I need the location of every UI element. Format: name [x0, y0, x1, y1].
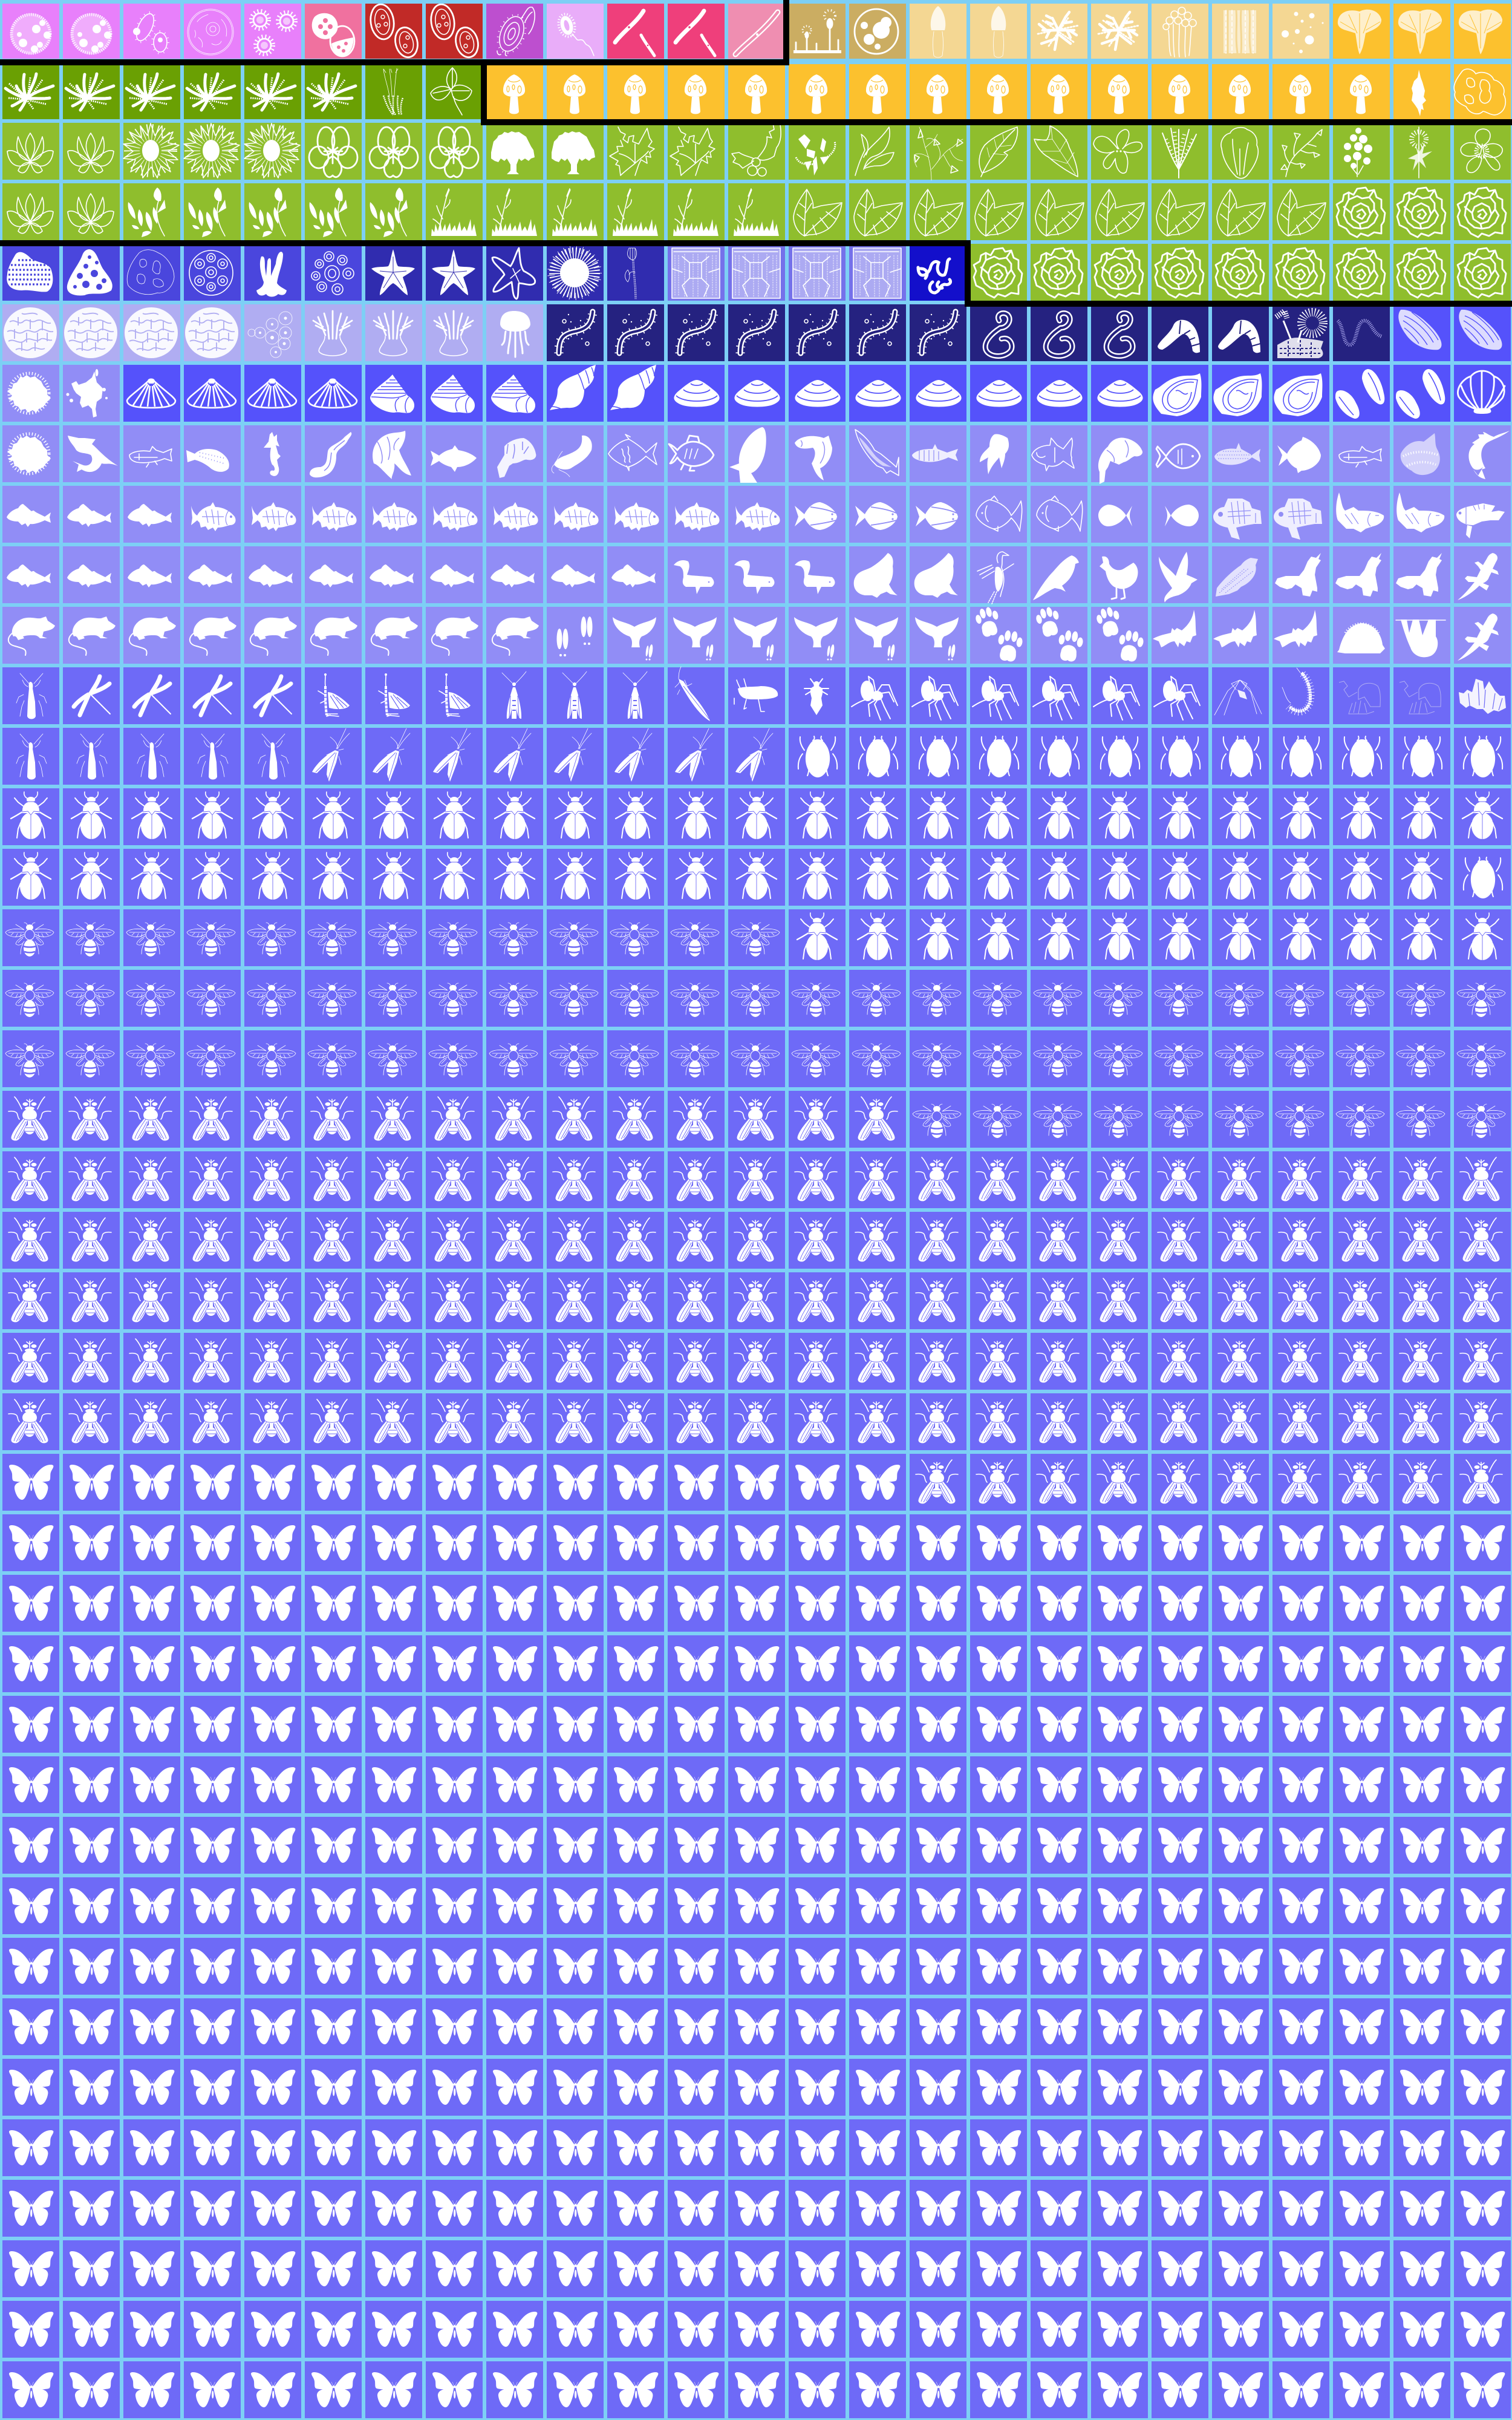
- tiles: dragonfly: [60, 666, 302, 726]
- tile: bark: [1210, 0, 1270, 60]
- panel: shells row 6: [0, 363, 1512, 424]
- tile: hoofprints: [544, 605, 605, 666]
- tile: moss: [363, 60, 423, 121]
- tile: worm knot: [907, 242, 968, 302]
- tiles: lacewing: [302, 726, 786, 786]
- tile: goldfish outline: [1028, 424, 1089, 484]
- tile: coral rings: [181, 242, 242, 302]
- tiles: frog: [847, 544, 968, 605]
- panel: flies rows 18 to 24: [0, 1089, 1512, 1512]
- tile: hen: [1089, 544, 1149, 605]
- tile: amoeba: [302, 0, 363, 60]
- tile: lichen: [1452, 60, 1512, 121]
- tiles: maple leaf: [605, 121, 726, 182]
- tile: grasshopper: [726, 666, 786, 726]
- tiles: starfish: [363, 242, 484, 302]
- tiles: mussel pair: [1331, 363, 1452, 424]
- panel: butterflies rows 25 to 39: [0, 1512, 1512, 2420]
- tiles: volvox: [0, 0, 121, 60]
- tiles: whale tail: [605, 605, 968, 666]
- tiles: bee: [907, 1089, 1512, 1150]
- top margin: [0, 0, 1512, 4]
- tile: splat: [60, 363, 121, 424]
- tile: louse: [786, 666, 847, 726]
- tile: spores: [847, 0, 907, 60]
- panel: fishes row 8: [0, 484, 1512, 544]
- tiles: whelk: [363, 363, 544, 424]
- tiles: fly: [0, 1150, 1512, 1452]
- tile: sprig: [847, 121, 907, 182]
- tile: pufferfish: [181, 424, 242, 484]
- tile: clover: [423, 60, 484, 121]
- tiles: chanterelle: [1331, 0, 1512, 60]
- tiles: mint leaves: [786, 182, 1331, 242]
- tile: fish outline: [121, 424, 181, 484]
- tiles: perch: [0, 484, 181, 544]
- tile: lettuce: [1210, 121, 1270, 182]
- tiles: stonefly: [484, 666, 665, 726]
- tiles: perch: [0, 544, 665, 605]
- tiles: coral fungus: [1028, 0, 1149, 60]
- panel: fishes row 7: [0, 424, 1512, 484]
- tile: herb bundle: [1149, 121, 1210, 182]
- tile: spiny blob: [0, 424, 60, 484]
- tile: spotted fish: [484, 424, 544, 484]
- tile: broad leaf: [1028, 121, 1089, 182]
- tiles: paramecium: [363, 0, 484, 60]
- tiles: eagle: [1270, 544, 1452, 605]
- tile: oval beetle: [1452, 847, 1512, 908]
- tile: cormorant: [968, 544, 1028, 605]
- tile: catfish: [544, 424, 605, 484]
- tile: seahorse: [242, 424, 302, 484]
- tile: spiky cells: [242, 0, 302, 60]
- tile: sea urchin: [544, 242, 605, 302]
- tile: leaping fish: [726, 424, 786, 484]
- tile: finger sponge: [242, 242, 302, 302]
- tile: jellyfish: [484, 302, 544, 363]
- tiles: fly: [0, 1089, 907, 1150]
- tile: trout: [847, 424, 907, 484]
- panel: invertebrates row 4: [0, 242, 1512, 302]
- tiles: rose: [968, 242, 1512, 302]
- panel: mammals row 10: [0, 605, 1512, 666]
- tile: hedgehog: [1331, 605, 1391, 666]
- tiles: tree: [484, 121, 605, 182]
- tiles: butterfly: [0, 1512, 1512, 2420]
- tiles: sunflower: [121, 121, 302, 182]
- tile: mould: [786, 0, 847, 60]
- tile: marlin: [1452, 424, 1512, 484]
- tile: thin worm: [1331, 302, 1391, 363]
- tiles: ground beetle: [0, 786, 1512, 847]
- group boundary: first black step line: [0, 0, 1512, 122]
- tile: small fish: [907, 424, 968, 484]
- tile: fish outline: [1331, 424, 1391, 484]
- tile: vine: [907, 121, 968, 182]
- tiles: oyster: [1149, 363, 1331, 424]
- tiles: conch: [544, 363, 665, 424]
- tiles: cod: [1331, 484, 1452, 544]
- tile: lizard: [1452, 544, 1512, 605]
- tiles: spider: [847, 666, 1210, 726]
- tiles: stick insect: [0, 726, 302, 786]
- tile: four-petal flower: [1089, 121, 1149, 182]
- tile: protozoan: [484, 0, 544, 60]
- group boundary: second black step line: [0, 243, 1512, 304]
- tiles: oval beetle: [786, 726, 1512, 786]
- tiles: flatfish: [786, 484, 968, 544]
- panel: insects row 12: [0, 726, 1512, 786]
- tile: harvestman: [1210, 666, 1270, 726]
- tiles: plate texture: [665, 242, 907, 302]
- panel: microbes and fungi row 0: [0, 0, 1512, 60]
- tiles: brain coral: [0, 302, 242, 363]
- tiles: fly: [907, 1452, 1512, 1512]
- panel: plants row 3: [0, 182, 1512, 242]
- tile: songbird: [1028, 544, 1089, 605]
- tiles: coil worm: [968, 302, 1149, 363]
- tiles: lotus: [0, 121, 121, 182]
- tiles: angelfish outline: [968, 484, 1089, 544]
- tile: fish right: [1149, 484, 1210, 544]
- tiles: ground beetle: [786, 908, 1512, 968]
- tile: fish silhouette: [423, 424, 484, 484]
- tile: plump fish: [1270, 424, 1331, 484]
- tile: salmon: [786, 424, 847, 484]
- tiles: mayfly: [302, 666, 484, 726]
- tile: centipede: [1270, 666, 1331, 726]
- tile: zoanthid: [242, 302, 302, 363]
- tile: flowering herb: [1391, 121, 1452, 182]
- tiles: cichlid: [1210, 484, 1331, 544]
- tile: leaf: [968, 121, 1028, 182]
- tile: flagellate: [544, 0, 605, 60]
- panel: bees rows 16 and 17: [0, 968, 1512, 1089]
- tiles: diatoms: [605, 0, 726, 60]
- tiles: carp: [181, 484, 786, 544]
- tiles: duck: [665, 544, 847, 605]
- tiles: rose: [1331, 182, 1512, 242]
- tiles: bat: [1149, 605, 1331, 666]
- tile: outline fish: [665, 424, 726, 484]
- tile: textured fish: [1210, 424, 1270, 484]
- tiles: bee: [0, 968, 1512, 1089]
- tile: goldfish: [968, 424, 1028, 484]
- tile: lizard: [1452, 605, 1512, 666]
- tiles: branch: [121, 182, 423, 242]
- tiles: lotus: [0, 182, 121, 242]
- tiles: rat: [0, 605, 544, 666]
- tiles: paw prints: [968, 605, 1149, 666]
- panel: marine row 5: [0, 302, 1512, 363]
- tiles: fern tuft: [0, 60, 363, 121]
- tile: flower bunch: [1331, 121, 1391, 182]
- tile: twig: [1270, 121, 1331, 182]
- tile: insect cluster: [1452, 666, 1512, 726]
- tile: enoki: [1149, 0, 1210, 60]
- tiles: morel: [907, 0, 1028, 60]
- tile: shark: [60, 424, 121, 484]
- tile: eel: [302, 424, 363, 484]
- panel: plants and mushrooms row 1: [0, 60, 1512, 121]
- tile: speckled fish: [1391, 424, 1452, 484]
- tile: crinoid: [605, 242, 665, 302]
- tile: sloth: [1391, 605, 1452, 666]
- tile: coral cluster: [302, 242, 363, 302]
- tiles: segmented worm: [544, 302, 968, 363]
- tile: fan shell: [1452, 363, 1512, 424]
- tile: stick insect: [0, 666, 60, 726]
- tiles: scorpion outline: [1331, 666, 1452, 726]
- tiles: pansy: [302, 121, 484, 182]
- panel: beetles rows 13 to 15: [0, 786, 1512, 968]
- tile: striped fish: [605, 424, 665, 484]
- panel: plants row 2: [0, 121, 1512, 182]
- tile: bass: [363, 424, 423, 484]
- tile: flowering branch: [786, 121, 847, 182]
- tiles: ground beetle: [0, 847, 1452, 908]
- tile: buttercup: [1452, 121, 1512, 182]
- tiles: bee: [0, 908, 786, 968]
- tile: coral outline: [121, 242, 181, 302]
- tile: starfish outline: [484, 242, 544, 302]
- tile: bacteria: [121, 0, 181, 60]
- tiles: shrimp: [1149, 302, 1270, 363]
- tile: fish icon: [1149, 424, 1210, 484]
- tile: holly: [726, 121, 786, 182]
- tile: diatom outline: [726, 0, 786, 60]
- tile: jumping carp: [1089, 424, 1149, 484]
- tiles: butterfly: [0, 1452, 907, 1512]
- tile: holed sponge: [60, 242, 121, 302]
- tile: blot fungus: [1391, 60, 1452, 121]
- panel: arthropods row 11: [0, 666, 1512, 726]
- tiles: anemone: [302, 302, 484, 363]
- tiles: scallop: [121, 363, 363, 424]
- panel: fishes, amphibians and birds row 9: [0, 544, 1512, 605]
- tile: tropical fish: [1452, 484, 1512, 544]
- tiles: clam: [665, 363, 1149, 424]
- tile: sponge: [0, 242, 60, 302]
- tile: fish left: [1089, 484, 1149, 544]
- tile: dots: [1270, 0, 1331, 60]
- tiles: reed and grass: [423, 182, 786, 242]
- tiles: mussel: [1391, 302, 1512, 363]
- tile: polyps: [1270, 302, 1331, 363]
- tile: spiny blob: [0, 363, 60, 424]
- tiles: mushroom: [484, 60, 1391, 121]
- tile: cell: [181, 0, 242, 60]
- tile: hawk: [1210, 544, 1270, 605]
- tile: winged insect: [665, 666, 726, 726]
- tile: dove: [1149, 544, 1210, 605]
